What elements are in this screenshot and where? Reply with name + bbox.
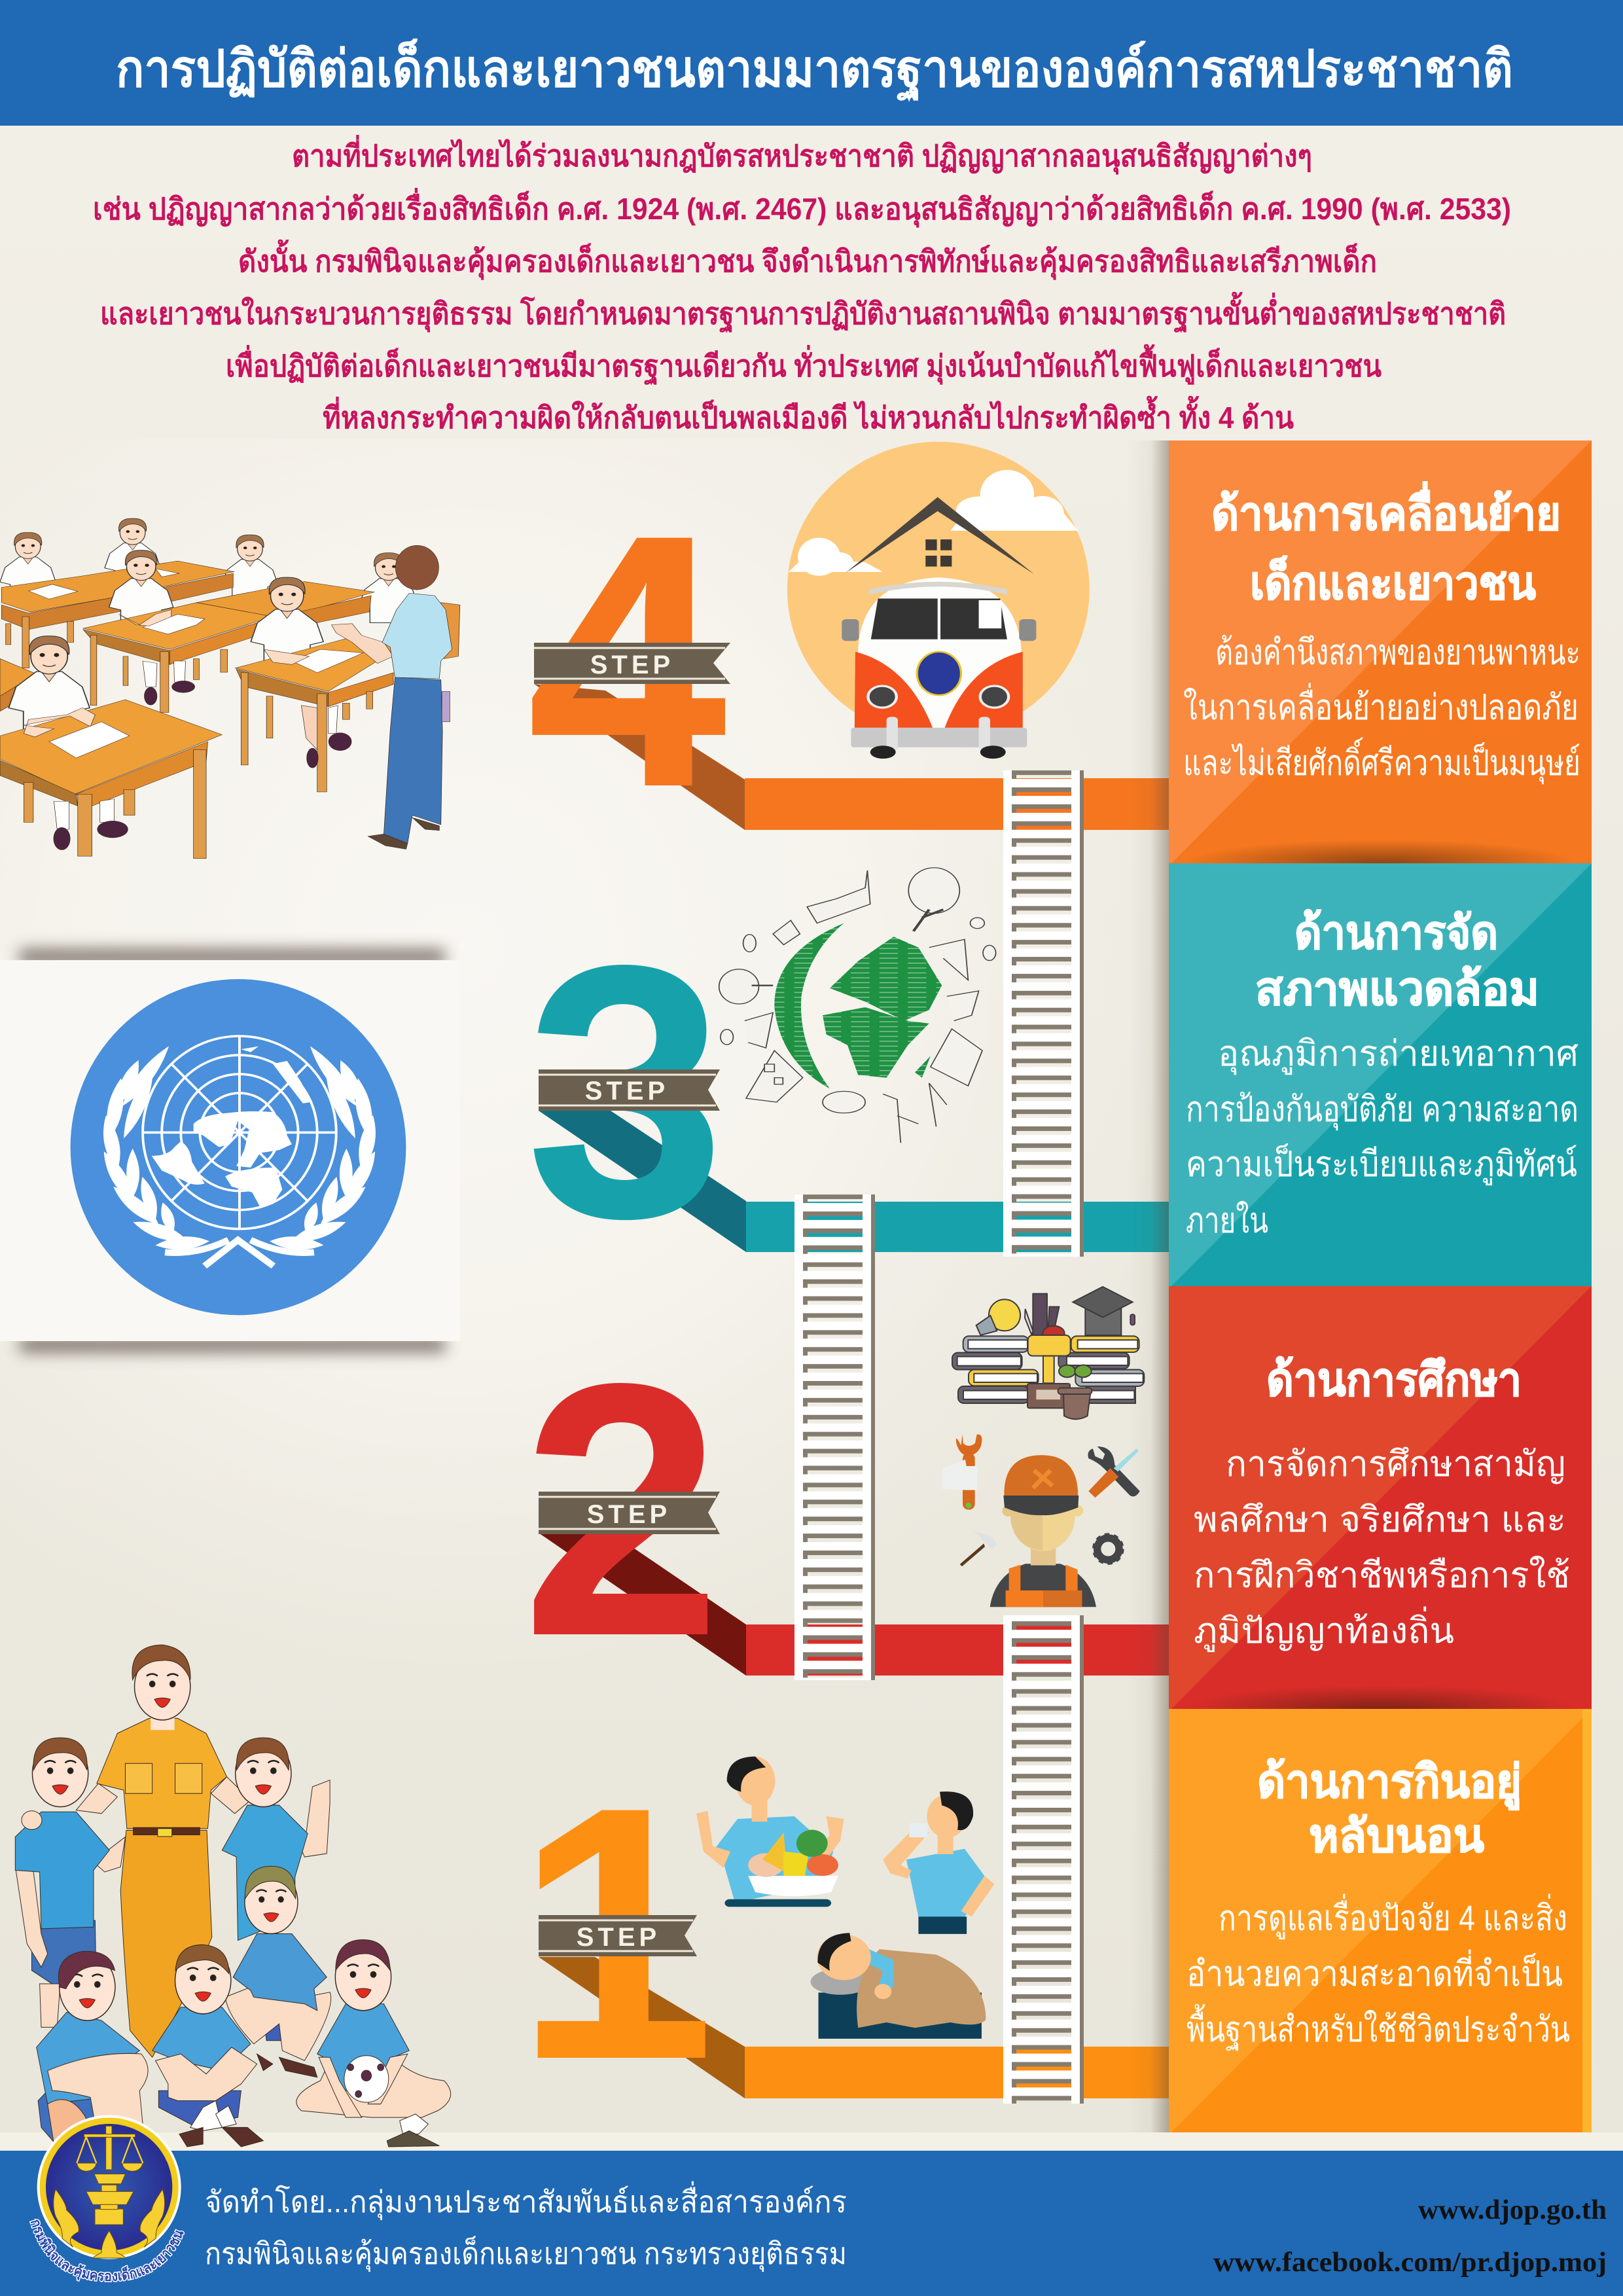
body text: อุณภูมิการถ่ายเทอากาศ [1218,1034,1578,1075]
icon: vocational worker [942,1435,1140,1607]
digit 1 with step ribbon: 1 [515,1732,715,2134]
footer web links: www.facebook.com/pr.djop.moj [1213,2248,1607,2278]
icon: eating person [696,1757,994,1934]
body text [1186,1034,1578,1240]
icon: globe and environment sketch [719,868,996,1143]
illustration: officer and children [15,1645,451,2147]
heading: ด้านการกินอยู่ [1257,1756,1522,1810]
intro text block: ตามที่ประเทศไทยได้ร่วมลงนามกฎบัตรสหประชาชาติ ปฏิญญาสากลอนุสนธิสัญญาต่างๆ [292,135,1312,175]
digit 2 with step ribbon: STEP [587,1500,671,1529]
connector: step 3 bar and fold [539,1111,1169,1252]
body text: ภายใน [1186,1200,1268,1240]
header band [0,0,1623,126]
footer web links: www.djop.go.th [1418,2195,1607,2225]
body text [1183,633,1580,785]
shadow beside cards [1129,440,1169,2132]
digit 4 with step ribbon: 4 [527,459,729,862]
digit 2 with step ribbon: 2 [522,1308,722,1711]
footer credits [205,2181,847,2272]
digit 4 with step ribbon: STEP [590,651,674,679]
heading [1211,481,1561,609]
digit 3 with step ribbon: STEP [585,1077,669,1105]
body text [1194,1444,1570,1652]
digit 3 with step ribbon: 3 [526,890,726,1293]
panel: environment card [1169,863,1592,1286]
icon: department logo: กรมพินิจและคุ้มครองเด็กและเยาวชน [29,2219,185,2282]
connector: step 1 bar and fold [539,1957,1169,2098]
ladder: step 1 to 2 [1003,1615,1084,2104]
intro text block: ที่หลงกระทำความผิดให้กลับตนเป็นพลเมืองดี ไม่หวนกลับไปกระทำผิดซ้ำ ทั้ง 4 ด้าน [323,395,1294,435]
panel: UN emblem card [0,960,460,1341]
ladder: step 2 to 3 [794,1194,875,1680]
footer web links [1213,2195,1607,2278]
connector: step 4 bar and fold [534,684,1169,830]
intro text block: ดังนั้น กรมพินิจและคุ้มครองเด็กและเยาวชน จึงดำเนินการพิทักษ์และคุ้มครองสิทธิและเสรีภาพเด็ก [238,239,1377,280]
illustration: classroom [0,518,460,859]
shadow below UN panel [20,1336,445,1352]
body text [1186,1893,1570,2051]
panel: transport card [1169,440,1592,887]
footer band [0,2151,1623,2296]
body text: การจัดการศึกษาสามัญ [1226,1444,1565,1484]
heading: หลับนอน [1309,1810,1484,1861]
body text: ความเป็นระเบียบและภูมิทัศน์ [1186,1143,1577,1185]
connector: step 2 bar and fold [539,1533,1169,1676]
heading [1257,1756,1522,1861]
icon: van and house [787,442,1090,759]
footer credits: กรมพินิจและคุ้มครองเด็กและเยาวชน กระทรวงยุติธรรม [205,2236,847,2272]
panel: living card [1169,1709,1592,2132]
icon: sleeping person [811,1933,986,2039]
ladder: step 3 to 4 [1003,770,1084,1257]
intro text block: และเยาวชนในกระบวนการยุติธรรม โดยกำหนดมาตรฐานการปฏิบัติงานสถานพินิจ ตามมาตรฐานขั้นต่ำของสหประชาชาติ [100,291,1506,333]
body text: ภูมิปัญญาท้องถิ่น [1194,1606,1454,1652]
body text: พลศึกษา จริยศึกษา และ [1194,1500,1566,1539]
heading [1255,907,1539,1014]
icon: education books [952,1287,1144,1419]
heading: ด้านการเคลื่อนย้าย [1211,481,1561,539]
footer credits: จัดทำโดย...กลุ่มงานประชาสัมพันธ์และสื่อสารองค์กร [205,2181,847,2221]
heading: เด็กและเยาวชน [1250,555,1536,609]
heading: สภาพแวดล้อม [1255,963,1539,1014]
shadow above UN panel [20,949,445,965]
intro text block: เช่น ปฏิญญาสากลว่าด้วยเรื่องสิทธิเด็ก ค.ศ. 1924 (พ.ศ. 2467) และอนุสนธิสัญญาว่าด้วยสิทธิเด็ก ค.ศ. 1990 (พ.ศ. 2533) [93,188,1511,228]
icon: UN emblem circle [71,979,406,1315]
body text: การฝึกวิชาชีพหรือการใช้ [1194,1555,1570,1595]
intro text block: เพื่อปฏิบัติต่อเด็กและเยาวชนมีมาตรฐานเดียวกัน ทั่วประเทศ มุ่งเน้นบำบัดแก้ไขฟื้นฟูเด็กและเยาวชน [226,344,1382,386]
icon: department logo [29,2115,185,2282]
intro text block [93,135,1511,435]
body text: อำนวยความสะอาดที่จำเป็น [1186,1949,1563,1994]
title: การปฏิบัติต่อเด็กและเยาวชนตามมาตรฐานขององค์การสหประชาชาติ [116,39,1513,102]
panel: education card [1169,1286,1592,1732]
digit 1 with step ribbon: STEP [577,1923,660,1952]
heading: ด้านการศึกษา [1266,1354,1522,1405]
heading: ด้านการจัด [1294,907,1498,958]
